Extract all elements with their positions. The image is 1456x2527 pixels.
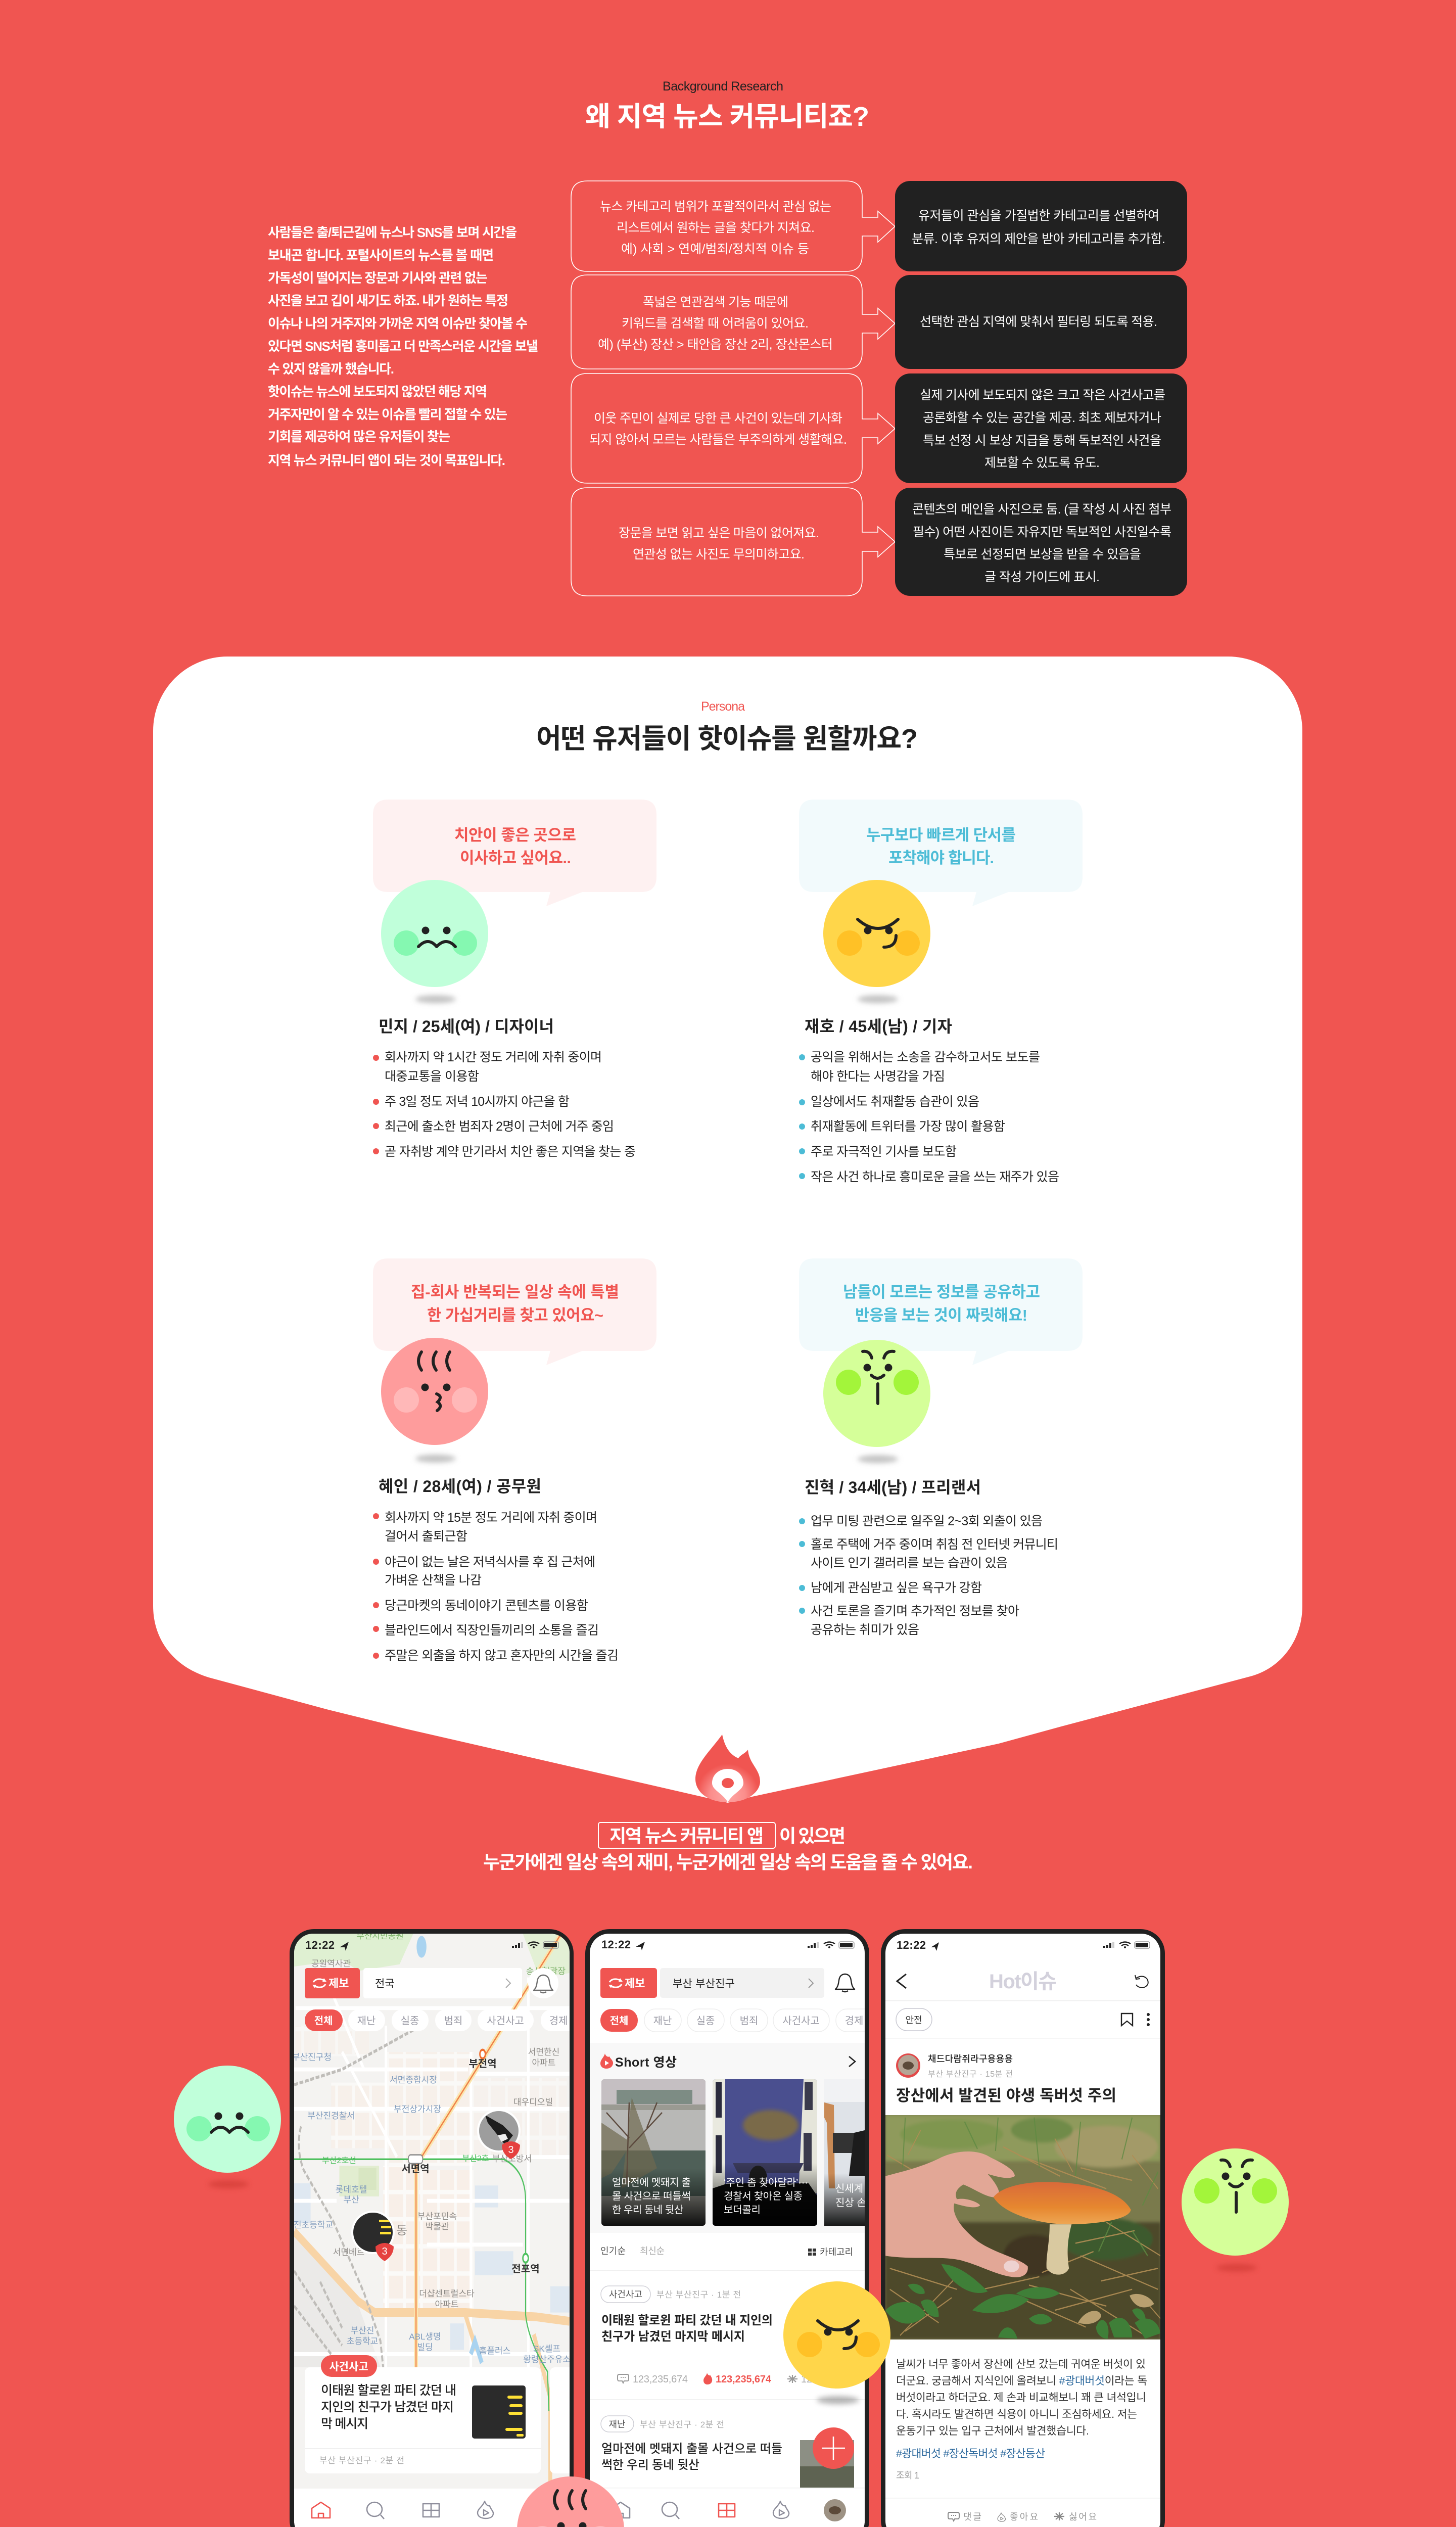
video card: 보더콜리: 경찰서 찾아온 실종 xyxy=(724,2190,803,2202)
persona heading xyxy=(536,699,918,754)
panel: problem 3 with arrow: 이웃 주민이 실제로 당한 큰 사건이 있는데 기사화 xyxy=(594,411,842,426)
feed item 1: 123,235,674 xyxy=(716,2374,772,2385)
map labels: 아파트 xyxy=(435,2300,458,2309)
panel: solution 4: 특보로 선정되면 보상을 받을 수 있음을 xyxy=(944,547,1141,561)
name: 혜인: 혜인 / 28세(여) / 공무원 xyxy=(379,1477,541,1495)
map pin: cat photo: 3 xyxy=(508,2144,514,2156)
panel: solution 3 xyxy=(895,373,1187,483)
speech bubble: 재호: 포착해야 합니다. xyxy=(888,849,994,867)
panel: problem 4 with arrow: 연관성 없는 사진도 무의미하고요. xyxy=(633,547,805,561)
map labels: 부산2호선 xyxy=(322,2156,356,2165)
notification bell xyxy=(528,1968,558,1998)
map labels: 박물관 xyxy=(426,2222,449,2231)
sort tabs: 카테고리 xyxy=(820,2247,853,2257)
bottom tab bar xyxy=(294,2489,570,2527)
map labels: 공원역사관 xyxy=(311,1959,351,1969)
map labels: 부전상가시장 xyxy=(394,2104,441,2114)
persona card: 민지 xyxy=(373,800,656,1159)
bullet list: 재호: 일상에서도 취재활동 습관이 있음 xyxy=(811,1095,979,1109)
video card: 신세계: 신세계 xyxy=(835,2183,863,2194)
feed item 1: 이태원 할로윈 파티 갔던 내 지인의 xyxy=(601,2314,773,2327)
panel: problem 1 with arrow xyxy=(571,181,895,271)
bullet list: 민지: 곧 자취방 계약 만기라서 치안 좋은 지역을 찾는 중 xyxy=(385,1145,636,1159)
category chips: 사건사고 xyxy=(487,2015,524,2027)
region selector: 부산 부산진구 xyxy=(673,1978,735,1990)
article body: 더군요. 궁금해서 지식인에 올려보니 #광대버섯이라는 독 xyxy=(896,2375,1147,2387)
intro paragraph: 거주자만이 알 수 있는 이슈를 빨리 접할 수 있는 xyxy=(268,407,507,422)
video card: 신세계 xyxy=(824,2079,875,2226)
article body: 버섯이라고 하더군요. 제 손과 비교해보니 꽤 큰 녀석입니 xyxy=(896,2392,1146,2404)
category tag and actions xyxy=(885,2008,1160,2039)
bullet list: 혜인: 걸어서 출퇴근함 xyxy=(385,1529,467,1543)
feed item 1: 부산 부산진구 · 1분 전 xyxy=(656,2290,741,2300)
panel: solution 4: 필수) 어떤 사진이든 자유지만 독보적인 사진일수록 xyxy=(913,525,1171,539)
persona card: 재호 xyxy=(799,800,1083,1184)
reaction bar: 좋아요 xyxy=(1010,2512,1038,2522)
section heading: background research: 왜 지역 뉴스 커뮤니티죠? xyxy=(585,102,869,132)
feed item 1: 123,235,674 xyxy=(801,2374,857,2385)
map labels: 서면종합시장 xyxy=(390,2075,437,2085)
map labels: 부산진 xyxy=(351,2326,374,2335)
character: pink floating bottom xyxy=(517,2476,624,2527)
map labels: 송상현광장 xyxy=(526,1967,566,1976)
video card: 신세계: 진상 손님 xyxy=(835,2197,875,2209)
category chips: 전체 xyxy=(314,2015,333,2027)
panel: problem 1 with arrow: 뉴스 카테고리 범위가 포괄적이라서 관심 없는 xyxy=(600,200,831,214)
article title: 장산에서 발견된 야생 독버섯 주의 xyxy=(896,2087,1116,2104)
bullet list: 재호: 주로 자극적인 기사를 보도함 xyxy=(811,1145,957,1159)
map labels: 부산 xyxy=(343,2195,359,2205)
map labels xyxy=(292,1931,571,2364)
bullet list: 진혁: 사이트 인기 갤러리를 보는 습관이 있음 xyxy=(811,1556,1008,1570)
feed item 2: 부산 부산진구 · 2분 전 xyxy=(640,2420,724,2429)
intro paragraph: 지역 뉴스 커뮤니티 앱이 되는 것이 목표입니다. xyxy=(268,453,505,468)
map labels: 부산시민공원 xyxy=(356,1931,404,1941)
category chips: 재난 xyxy=(653,2015,672,2027)
speech bubble: 민지 xyxy=(373,800,656,906)
persona card: 혜인 xyxy=(373,1258,656,1663)
map labels: 대우디오빌 xyxy=(513,2097,553,2107)
intro paragraph: 핫이슈는 뉴스에 보도되지 않았던 해당 지역 xyxy=(268,384,487,399)
map pin: cat photo xyxy=(477,2109,521,2159)
bullet list: 재호: 취재활동에 트위터를 가장 많이 활용함 xyxy=(811,1119,1005,1134)
intro paragraph: 이슈나 나의 거주지와 가까운 지역 이슈만 찾아볼 수 xyxy=(268,316,528,331)
map labels: 서면베르 xyxy=(333,2248,364,2257)
panel: solution 4: 콘텐츠의 메인을 사진으로 둠. (글 작성 시 사진 첨부 xyxy=(912,502,1171,517)
map pin: chat screenshot: 3 xyxy=(382,2246,388,2257)
panel: problem 3 with arrow: 되지 않아서 모르는 사람들은 부주의하게 생활해요. xyxy=(589,433,847,447)
feed item 1: 123,235,674 xyxy=(633,2374,688,2385)
panel: problem 2 with arrow xyxy=(571,275,895,369)
map labels: 초등학교 xyxy=(347,2336,378,2346)
status bar xyxy=(897,1939,1150,1951)
bullet list: 혜인 xyxy=(373,1511,619,1663)
bullet list: 민지: 회사까지 약 1시간 정도 거리에 자취 중이며 xyxy=(385,1050,602,1064)
map labels: 부산포민속 xyxy=(417,2212,457,2221)
persona card: 진혁 xyxy=(799,1258,1083,1637)
panel: solution 3: 특보 선정 시 보상 지급을 통해 독보적인 사건을 xyxy=(923,434,1161,448)
category chips: 경제 xyxy=(845,2015,863,2027)
bullet list: 재호 xyxy=(799,1050,1059,1184)
map pin: chat screenshot xyxy=(351,2211,395,2261)
reaction bar: 싫어요 xyxy=(1069,2512,1097,2522)
panel: solution 3: 공론화할 수 있는 공간을 제공. 최초 제보자거나 xyxy=(923,411,1161,425)
map background xyxy=(292,1931,571,2490)
map labels: ABL생명 xyxy=(409,2332,441,2342)
tip button: 제보 xyxy=(625,1977,645,1990)
category chips: 사건사고 xyxy=(782,2015,820,2027)
panel: problem 2 with arrow: 폭넓은 연관검색 기능 때문에 xyxy=(643,295,788,309)
bullet list: 혜인: 야근이 없는 날은 저녁식사를 후 집 근처에 xyxy=(385,1555,595,1569)
short video section xyxy=(590,2043,875,2233)
tip button: 제보 xyxy=(328,1977,349,1990)
news card on map: 사건사고 xyxy=(329,2361,368,2373)
article body: 운동기구 있는 입구 근처에서 발견했습니다. xyxy=(896,2425,1089,2437)
intro paragraph: 수 있지 않을까 했습니다. xyxy=(268,361,394,377)
bullet list: 민지: 최근에 출소한 범죄자 2명이 근처에 거주 중임 xyxy=(385,1119,614,1134)
status bar: 12:22 xyxy=(601,1938,631,1951)
character: lime floating right xyxy=(1182,2148,1289,2272)
bullet list: 민지: 대중교통을 이용함 xyxy=(385,1069,479,1084)
news card on map: 막 메시지 xyxy=(321,2417,368,2431)
speech bubble: 민지: 치안이 좋은 곳으로 xyxy=(454,826,576,844)
map labels: 전포역 xyxy=(511,2263,540,2275)
article body: 다. 혹시라도 발견하면 식용이 아니니 조심하세요. 저는 xyxy=(896,2408,1137,2420)
feed item 2 xyxy=(601,2416,854,2488)
panel: solution 1 xyxy=(895,181,1187,271)
panel: problem 2 with arrow: 예) (부산) 장산 > 태안읍 장산 2리, 장산몬스터 xyxy=(598,338,833,352)
panel: problem 1 with arrow: 예) 사회 > 연예/범죄/정치적 이슈 등 xyxy=(621,242,809,256)
bullet list: 진혁: 홀로 주택에 거주 중이며 취침 전 인터넷 커뮤니티 xyxy=(811,1537,1058,1552)
panel: solution 2 xyxy=(895,275,1187,369)
map labels: 롯데호텔 xyxy=(336,2185,367,2194)
map labels: 부전역 xyxy=(468,2058,497,2070)
category chips: 범죄 xyxy=(444,2015,462,2027)
map labels: 부산소방서 xyxy=(492,2154,532,2164)
map labels: 전초등학교 xyxy=(294,2220,333,2230)
name: 민지: 민지 / 25세(여) / 디자이너 xyxy=(379,1017,554,1036)
short video section: Short 영상 xyxy=(615,2055,677,2070)
article body xyxy=(896,2358,1147,2437)
character: lime cheeky xyxy=(823,1340,930,1463)
bullet list: 진혁: 사건 토론을 즐기며 추가적인 정보를 찾아 xyxy=(811,1604,1019,1618)
panel: problem 4 with arrow xyxy=(571,488,895,596)
bullet list: 혜인: 당근마켓의 동네이야기 콘텐츠를 이용함 xyxy=(385,1599,588,1613)
map labels: 서면역 xyxy=(401,2163,430,2175)
tip button xyxy=(600,1968,657,1998)
callout: value proposition: 이 있으면 xyxy=(779,1826,846,1846)
phone: map screen xyxy=(290,1929,581,2527)
speech bubble: 재호: 누구보다 빠르게 단서를 xyxy=(866,826,1016,844)
view count: 조회 1 xyxy=(896,2470,919,2481)
panel: problem 4 with arrow: 장문을 보면 읽고 싶은 마음이 없어져요. xyxy=(619,526,819,540)
speech bubble: 진혁: 반응을 보는 것이 짜릿해요! xyxy=(855,1306,1027,1324)
category chips: 실종 xyxy=(696,2015,715,2027)
region selector xyxy=(363,1968,522,1998)
panel: problem 2 with arrow: 키워드를 검색할 때 어려움이 있어요. xyxy=(622,316,809,331)
map labels: 서면한신 xyxy=(528,2047,559,2057)
hashtags: #광대버섯 #장산독버섯 #장산등산 xyxy=(896,2448,1045,2460)
video card: 멧돼지: 한 우리 동네 뒷산 xyxy=(612,2204,683,2216)
feed item 1: 친구가 남겼던 마지막 메시지 xyxy=(601,2330,745,2344)
bullet list: 재호: 작은 사건 하나로 흥미로운 글을 쓰는 재주가 있음 xyxy=(811,1170,1059,1184)
sort tabs xyxy=(590,2246,865,2271)
navigation header xyxy=(885,1971,1160,2001)
news card on map: 이태원 할로윈 파티 갔던 내 xyxy=(321,2383,456,2398)
character: green worried xyxy=(381,880,488,1003)
name: 진혁: 진혁 / 34세(남) / 프리랜서 xyxy=(805,1478,981,1496)
map labels: 홈플러스 xyxy=(479,2346,510,2356)
status bar xyxy=(601,1938,854,1951)
map labels: 아파트 xyxy=(532,2058,555,2068)
bullet list: 민지 xyxy=(373,1050,636,1159)
panel: problem 1 with arrow: 리스트에서 원하는 글을 찾다가 지쳐요. xyxy=(617,221,815,235)
section heading: background research xyxy=(585,79,869,132)
intro paragraph: 있다면 SNS처럼 흥미롭고 더 만족스러운 시간을 보낼 xyxy=(268,339,538,354)
speech bubble: 재호 xyxy=(799,800,1083,906)
news card on map: 지인의 친구가 남겼던 마지 xyxy=(321,2400,454,2414)
feed item 2: 얼마전에 멧돼지 출몰 사건으로 떠들 xyxy=(601,2442,782,2456)
name: 재호: 재호 / 45세(남) / 기자 xyxy=(805,1017,952,1036)
sort tabs: 최신순 xyxy=(640,2246,665,2256)
intro paragraph: 기회를 제공하여 많은 유저들이 찾는 xyxy=(268,429,450,444)
tip button xyxy=(305,1968,360,1998)
map labels: 부산진경찰서 xyxy=(307,2111,355,2121)
feed item 2: 썩한 우리 동네 뒷산 xyxy=(601,2458,699,2472)
video card: 멧돼지: 몰 사건으로 떠들썩 xyxy=(612,2190,691,2202)
bullet list: 민지: 주 3일 정도 저녁 10시까지 야근을 함 xyxy=(385,1095,570,1109)
speech bubble: 혜인: 집-회사 반복되는 일상 속에 특별 xyxy=(411,1283,619,1301)
speech bubble: 민지: 이사하고 싶어요.. xyxy=(460,849,571,867)
section heading: background research: Background Research xyxy=(663,79,783,93)
bottom tab bar xyxy=(590,2488,865,2527)
reaction bar xyxy=(885,2498,1160,2527)
author xyxy=(896,2053,1013,2079)
feed item 1 xyxy=(590,2286,865,2400)
bullet list: 혜인: 블라인드에서 직장인들끼리의 소통을 즐김 xyxy=(385,1623,599,1637)
character: yellow floating centre xyxy=(783,2281,890,2404)
speech bubble: 진혁 xyxy=(799,1258,1083,1365)
intro paragraph: 가독성이 떨어지는 장문과 기사와 관련 없는 xyxy=(268,270,488,286)
map labels: 더샵센트럴스타 xyxy=(419,2289,475,2299)
map labels: 빌딩 xyxy=(417,2343,433,2352)
navigation header: Hot이슈 xyxy=(989,1971,1057,1993)
bullet list: 재호: 공익을 위해서는 소송을 감수하고서도 보도를 xyxy=(811,1050,1040,1064)
reaction bar: 댓글 xyxy=(963,2512,981,2522)
callout: value proposition xyxy=(483,1822,973,1873)
news card on map xyxy=(305,2355,580,2473)
floating add button xyxy=(813,2427,854,2469)
phone: article screen xyxy=(881,1929,1165,2527)
notification bell xyxy=(835,1974,855,1992)
panel: solution 1: 유저들이 관심을 가질법한 카테고리를 선별하여 xyxy=(918,209,1159,223)
video card: 멧돼지: 얼마전에 멧돼지 출 xyxy=(612,2177,691,2188)
sort tabs: 인기순 xyxy=(600,2246,626,2256)
category chips: 경제 xyxy=(549,2015,568,2027)
callout: value proposition: 지역 뉴스 커뮤니티 앱 xyxy=(609,1826,764,1846)
bullet list: 진혁: 공유하는 취미가 있음 xyxy=(811,1623,919,1637)
panel: solution 1: 분류. 이후 유저의 제안을 받아 카테고리를 추가함. xyxy=(912,232,1165,246)
feed item 2: 재난 xyxy=(608,2419,626,2429)
persona heading: 어떤 유저들이 핫이슈를 원할까요? xyxy=(536,724,918,754)
bullet list: 진혁: 남에게 관심받고 싶은 욕구가 강함 xyxy=(811,1581,982,1595)
news card on map: 부산 부산진구 · 2분 전 xyxy=(319,2456,404,2465)
character: yellow smirking xyxy=(823,880,930,1003)
map labels: 부산2호 xyxy=(462,2154,489,2163)
region selector: 전국 xyxy=(375,1978,395,1990)
map labels: SK셀프 xyxy=(533,2344,560,2354)
category chips xyxy=(600,2009,876,2032)
panel: persona white card xyxy=(153,657,1302,1803)
category tag and actions: 안전 xyxy=(905,2015,922,2025)
callout: value proposition: 누군가에겐 일상 속의 재미, 누군가에겐 일상 속의 도움을 줄 수 있어요. xyxy=(483,1852,973,1873)
speech bubble: 진혁: 남들이 모르는 정보를 공유하고 xyxy=(843,1283,1040,1301)
article body: 날씨가 너무 좋아서 장산에 산보 갔는데 귀여운 버섯이 있 xyxy=(896,2358,1146,2370)
intro paragraph: 사진을 보고 깁이 새기도 하죠. 내가 원하는 특정 xyxy=(268,293,508,308)
video card: 보더콜리 xyxy=(713,2079,817,2226)
author: 채드다람쥐라구용용용 xyxy=(928,2054,1013,2064)
bullet list: 진혁: 업무 미팅 관련으로 일주일 2~3회 외출이 있음 xyxy=(811,1514,1043,1528)
panel: solution 3: 제보할 수 있도록 유도. xyxy=(984,456,1100,470)
video card: 보더콜리: 보더콜리 xyxy=(724,2204,761,2216)
category chips xyxy=(305,2009,581,2031)
bullet list: 진혁 xyxy=(799,1514,1058,1637)
panel: solution 2: 선택한 관심 지역에 맞춰서 필터링 되도록 적용. xyxy=(920,315,1157,329)
region selector xyxy=(660,1968,824,1998)
category chips: 재난 xyxy=(357,2015,375,2027)
category chips: 전체 xyxy=(610,2015,628,2027)
map labels: 동 xyxy=(396,2224,407,2237)
status bar xyxy=(306,1941,559,1951)
map labels: 황령산주유소 xyxy=(523,2355,571,2364)
bullet list: 혜인: 회사까지 약 15분 정도 거리에 자취 중이며 xyxy=(385,1511,597,1525)
character: green floating left xyxy=(174,2066,281,2188)
author: 부산 부산진구 · 15분 전 xyxy=(928,2070,1013,2079)
intro paragraph xyxy=(268,225,538,468)
phone: feed screen xyxy=(585,1929,876,2527)
panel: solution 4: 글 작성 가이드에 표시. xyxy=(984,570,1100,584)
speech bubble: 혜인 xyxy=(373,1258,656,1365)
feed item 1: 사건사고 xyxy=(609,2289,642,2300)
status bar: 12:22 xyxy=(305,1939,335,1951)
bullet list: 혜인: 가벼운 산책을 나감 xyxy=(385,1573,482,1587)
panel: solution 4 xyxy=(895,488,1187,596)
video card: 멧돼지 xyxy=(601,2079,706,2226)
speech bubble: 혜인: 한 가십거리를 찾고 있어요~ xyxy=(427,1306,603,1324)
intro paragraph: 사람들은 출/퇴근길에 뉴스나 SNS를 보며 시간을 xyxy=(268,225,517,240)
character: pink kissing xyxy=(381,1338,488,1463)
panel: problem 3 with arrow xyxy=(571,373,895,483)
video card: 보더콜리: ‘주인 좀 찾아달라’··· xyxy=(724,2177,808,2188)
bullet list: 재호: 해야 한다는 사명감을 가짐 xyxy=(811,1069,945,1084)
icon: flame with location pin xyxy=(695,1735,760,1802)
persona heading: Persona xyxy=(701,699,745,714)
panel: solution 3: 실제 기사에 보도되지 않은 크고 작은 사건사고를 xyxy=(920,388,1165,402)
status bar: 12:22 xyxy=(897,1939,926,1951)
intro paragraph: 보내곤 합니다. 포털사이트의 뉴스를 볼 때면 xyxy=(268,248,494,263)
photo: hand and mushroom xyxy=(885,2115,1160,2339)
bullet list: 혜인: 주말은 외출을 하지 않고 혼자만의 시간을 즐김 xyxy=(385,1649,619,1663)
map labels: 부산진구청 xyxy=(292,2052,332,2062)
category chips: 범죄 xyxy=(740,2015,758,2027)
category chips: 실종 xyxy=(401,2015,419,2027)
